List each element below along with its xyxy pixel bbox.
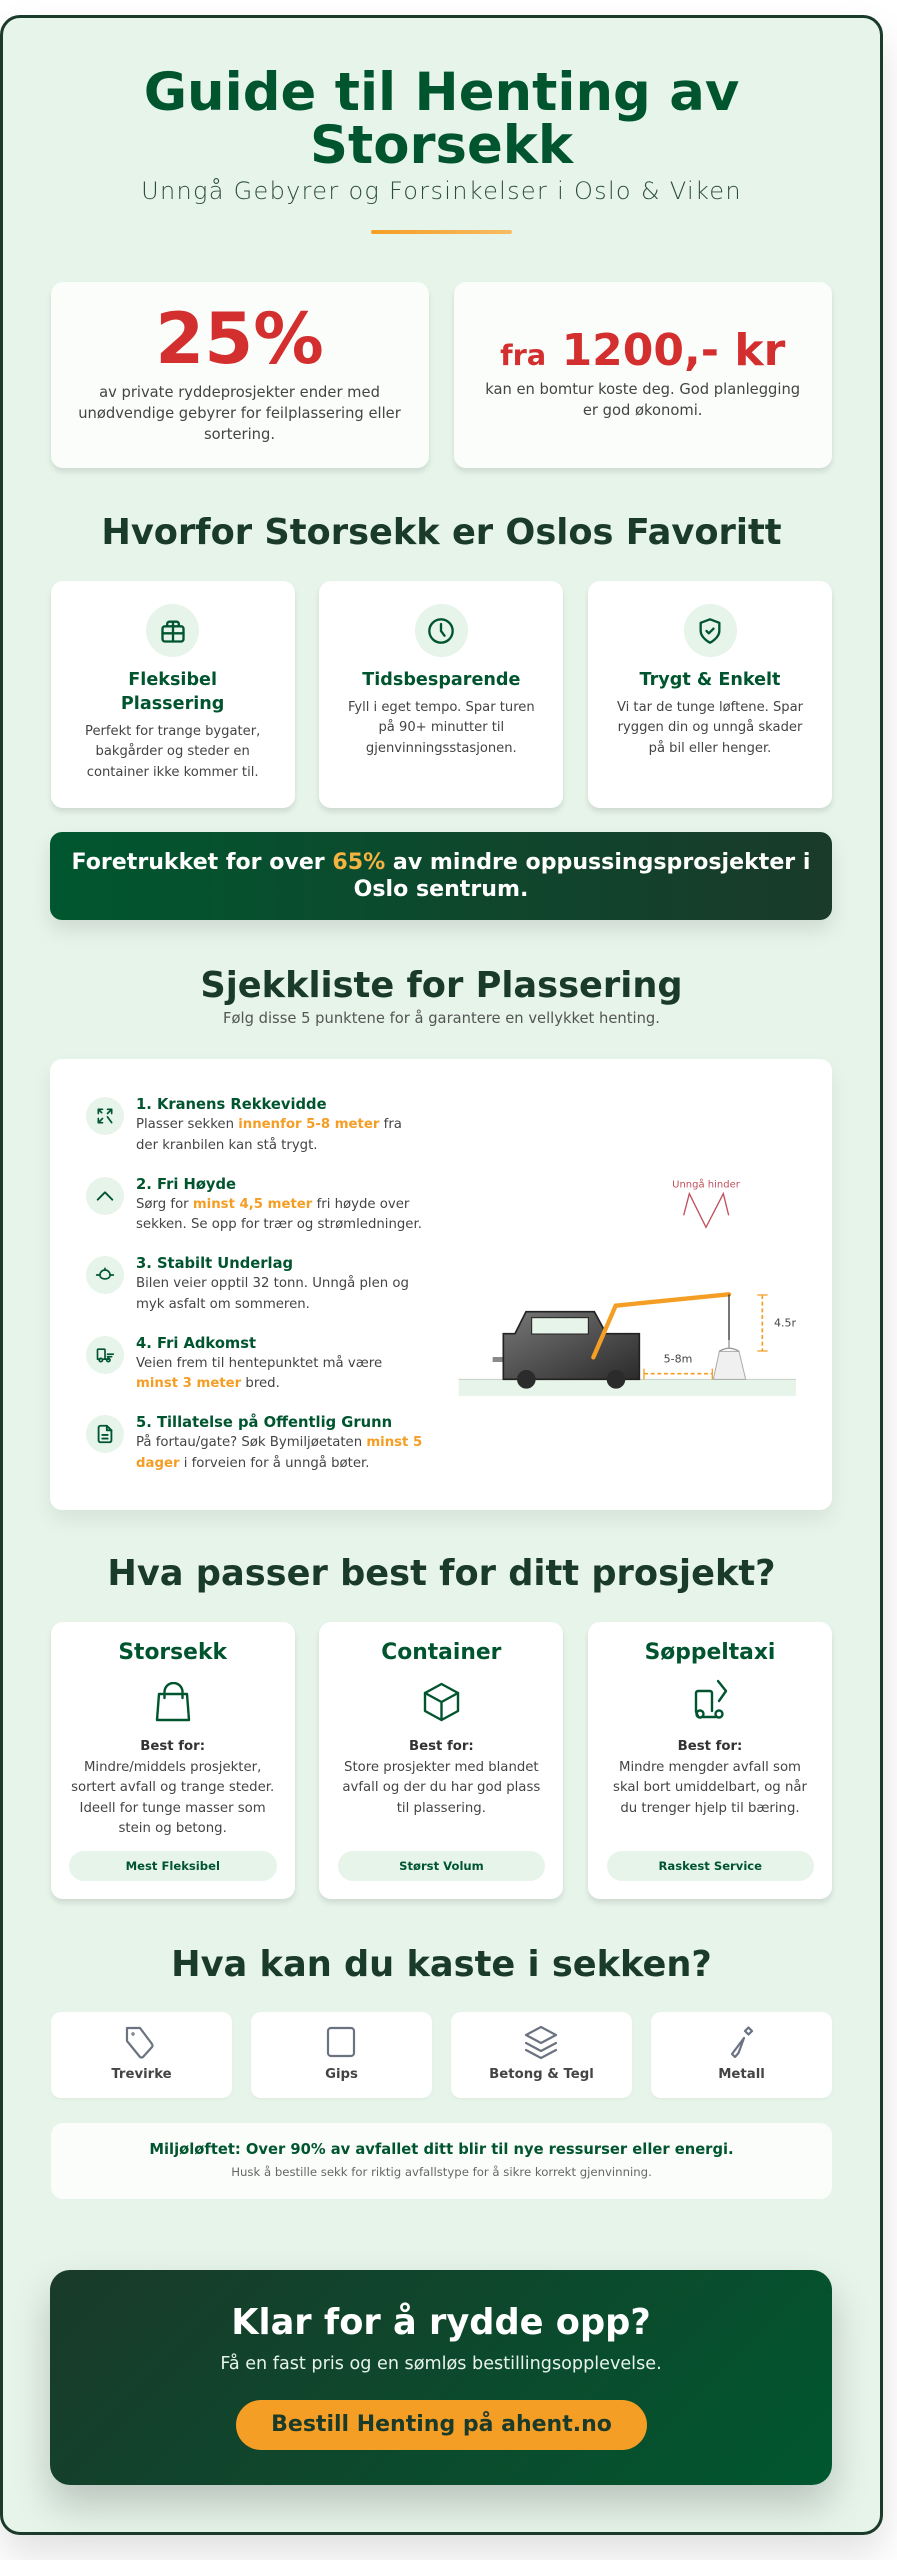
option tag xyxy=(606,1851,814,1881)
material: Betong & Tegl xyxy=(451,2012,632,2098)
card title xyxy=(121,670,224,714)
item text: Veien frem til hentepunktet må være xyxy=(136,1356,382,1370)
card title: Tidsbesparende xyxy=(362,670,520,690)
option text: du trenger hjelp til bæring. xyxy=(620,1800,800,1816)
stat text: unødvendige gebyrer for feilplassering eller xyxy=(78,405,401,422)
panel: checklist xyxy=(50,1059,832,1510)
card title: Trygt & Enkelt xyxy=(640,670,780,690)
cta button xyxy=(236,2400,647,2450)
icon: expand xyxy=(86,1097,124,1135)
stat card: 25% xyxy=(50,282,428,468)
sack xyxy=(713,1340,746,1379)
truck xyxy=(493,1312,639,1389)
card text: bakgårder og steder en xyxy=(96,744,250,759)
checklist item 3 xyxy=(86,1255,409,1312)
option title: Container xyxy=(381,1640,501,1665)
item text: der kranbilen kan stå trygt. xyxy=(136,1138,318,1153)
card text: container ikke kommer til. xyxy=(87,765,259,780)
material: Gips xyxy=(251,2012,432,2098)
crane rope xyxy=(727,1294,731,1340)
stat text: er god økonomi. xyxy=(583,402,702,419)
option text: skal bort umiddelbart, og når xyxy=(613,1780,807,1795)
obstacle warning: Unngå hinder xyxy=(672,1178,741,1191)
material: Trevirke xyxy=(51,2012,232,2098)
option text: avfall og der du har god plass xyxy=(342,1780,540,1795)
option text: stein og betong. xyxy=(118,1821,227,1836)
stat value: 25% xyxy=(155,298,324,380)
option text xyxy=(613,1739,807,1816)
item text: Sørg for minst 4,5 meter fri høyde over xyxy=(136,1196,409,1212)
option tag xyxy=(69,1851,276,1881)
title: Storsekk xyxy=(310,114,573,176)
item text xyxy=(136,1275,409,1312)
heading: compare: Hva passer best for ditt prosjekt? xyxy=(107,1553,776,1594)
card title: Fleksibel xyxy=(128,670,217,690)
heading: checklist: Sjekkliste for Plassering xyxy=(200,965,683,1006)
item title: 1. Kranens Rekkevidde xyxy=(136,1096,327,1113)
card text: gjenvinningsstasjonen. xyxy=(366,741,517,756)
orange divider xyxy=(371,230,512,234)
option card: Søppeltaxi xyxy=(588,1622,832,1899)
crane arm xyxy=(593,1294,729,1357)
material: Metall xyxy=(651,2012,832,2098)
icon: taxi truck xyxy=(694,1680,728,1719)
card text xyxy=(617,700,803,756)
option text: Mindre mengder avfall som xyxy=(619,1760,801,1774)
option tag: Raskest Service xyxy=(658,1859,762,1873)
obstacle warning xyxy=(672,1178,741,1227)
item title: 2. Fri Høyde xyxy=(136,1176,236,1192)
icon: document xyxy=(86,1415,124,1453)
option text: Best for: xyxy=(678,1739,742,1754)
option text: Store prosjekter med blandet xyxy=(344,1760,539,1774)
item title: 3. Stabilt Underlag xyxy=(136,1255,293,1272)
checklist item 4 xyxy=(86,1334,382,1391)
ground xyxy=(459,1379,796,1396)
stat text: kan en bomtur koste deg. God planlegging xyxy=(485,381,800,398)
banner: 65%: Foretrukket for over 65% av mindre oppussingsprosjekter i xyxy=(72,850,810,875)
checklist item 5 xyxy=(86,1413,422,1471)
option text xyxy=(342,1739,540,1816)
icon: cube xyxy=(424,1682,460,1722)
option tag: Størst Volum xyxy=(399,1859,484,1873)
benefit card: Fleksibel Plassering xyxy=(50,581,295,808)
banner: 65%: Oslo sentrum. xyxy=(354,877,528,902)
heading: what can go in the bag: Hva kan du kaste i sekken? xyxy=(171,1944,712,1985)
cta button: Bestill Henting på ahent.no xyxy=(271,2412,612,2437)
card text xyxy=(348,700,535,756)
item text: minst 3 meter bred. xyxy=(136,1376,280,1391)
item text xyxy=(136,1355,382,1391)
item text: Bilen veier opptil 32 tonn. Unngå plen og xyxy=(136,1276,409,1291)
icon: chevron up xyxy=(86,1176,124,1214)
item title: 5. Tillatelse på Offentlig Grunn xyxy=(136,1414,392,1431)
option tag: Mest Fleksibel xyxy=(126,1859,220,1873)
icon: layers xyxy=(524,2026,558,2060)
item text: sekken. Se opp for trær og strømledninger. xyxy=(136,1217,422,1232)
option text xyxy=(71,1739,274,1836)
stat text: av private ryddeprosjekter ender med xyxy=(99,384,380,401)
item text: Plasser sekken innenfor 5-8 meter fra xyxy=(136,1117,402,1132)
stat text xyxy=(485,381,800,419)
cta title: Klar for å rydde opp? xyxy=(231,2302,651,2343)
label: Gips xyxy=(325,2067,358,2082)
title xyxy=(144,62,739,176)
stat text xyxy=(78,384,401,443)
distance measure 5-8m xyxy=(644,1352,712,1379)
environment note xyxy=(51,2123,832,2199)
label: Metall xyxy=(718,2067,765,2082)
item text xyxy=(136,1117,402,1153)
benefit card: Tidsbesparende xyxy=(319,581,563,808)
diagram: crane truck placement xyxy=(458,1178,796,1396)
icon: shield check xyxy=(684,604,737,657)
label: Trevirke xyxy=(111,2067,172,2082)
option tag xyxy=(338,1851,545,1881)
banner: 65% xyxy=(50,832,832,920)
card text xyxy=(85,724,260,780)
subtitle: Unngå Gebyrer og Forsinkelser i Oslo & Viken xyxy=(141,177,742,205)
stat card: 1200 kr xyxy=(454,282,832,468)
note headline: Miljøløftet: Over 90% av avfallet ditt blir til nye ressurser eller energi. xyxy=(149,2141,734,2158)
option title: Søppeltaxi xyxy=(645,1640,775,1665)
height measure 4.5m: 4.5m xyxy=(774,1316,802,1329)
option text: Best for: xyxy=(409,1739,474,1754)
option text: sortert avfall og trange steder. xyxy=(71,1780,274,1795)
option title: Storsekk xyxy=(118,1640,227,1665)
item text xyxy=(136,1196,422,1232)
option text: Mindre/middels prosjekter, xyxy=(84,1760,261,1774)
card text: Perfekt for trange bygater, xyxy=(85,724,260,739)
height measure 4.5m xyxy=(757,1294,796,1352)
cta text: Få en fast pris og en sømløs bestillingsopplevelse. xyxy=(220,2354,662,2374)
option text: til plassering. xyxy=(397,1800,486,1816)
checklist intro: Følg disse 5 punktene for å garantere en vellykket henting. xyxy=(223,1010,660,1027)
icon: square xyxy=(326,2026,356,2058)
icon: box xyxy=(146,604,199,657)
call to action panel xyxy=(50,2270,832,2485)
option card: Container xyxy=(319,1622,563,1899)
item text: dager i forveien for å unngå bøter. xyxy=(136,1456,369,1471)
distance measure 5-8m: 5-8m xyxy=(664,1352,692,1365)
icon: ground xyxy=(86,1256,124,1294)
icon: clock xyxy=(415,604,468,657)
icon: metal tool xyxy=(730,2026,754,2058)
title: Guide til Henting av xyxy=(144,62,739,122)
card text: Fyll i eget tempo. Spar turen xyxy=(348,700,535,715)
checklist item 1 xyxy=(86,1096,402,1153)
item text: På fortau/gate? Søk Bymiljøetaten minst 5 xyxy=(136,1435,422,1450)
icon: tag xyxy=(126,2026,154,2059)
note text: Husk å bestille sekk for riktig avfallstype for å sikre korrekt gjenvinning. xyxy=(231,2165,652,2179)
item title: 4. Fri Adkomst xyxy=(136,1334,256,1352)
item text xyxy=(136,1434,422,1471)
stat value: fra 1200,- kr xyxy=(500,325,785,376)
card title: Plassering xyxy=(121,694,224,714)
checklist item 2 xyxy=(86,1176,422,1232)
option text: Ideell for tunge masser som xyxy=(80,1800,266,1816)
card text: ryggen din og unngå skader xyxy=(618,720,802,735)
card text: på bil eller henger. xyxy=(649,741,771,756)
icon: bag xyxy=(156,1682,190,1722)
option card: Storsekk xyxy=(50,1622,295,1899)
item text: myk asfalt om sommeren. xyxy=(136,1297,310,1312)
card text: Vi tar de tunge løftene. Spar xyxy=(617,700,803,715)
card text: på 90+ minutter til xyxy=(378,720,504,735)
benefit card: Trygt & Enkelt xyxy=(588,581,832,808)
heading: why storsekk: Hvorfor Storsekk er Oslos Favoritt xyxy=(101,512,782,553)
stat text: sortering. xyxy=(204,426,275,443)
option text: Best for: xyxy=(140,1739,205,1754)
label: Betong & Tegl xyxy=(489,2067,594,2082)
icon: truck xyxy=(86,1336,124,1374)
